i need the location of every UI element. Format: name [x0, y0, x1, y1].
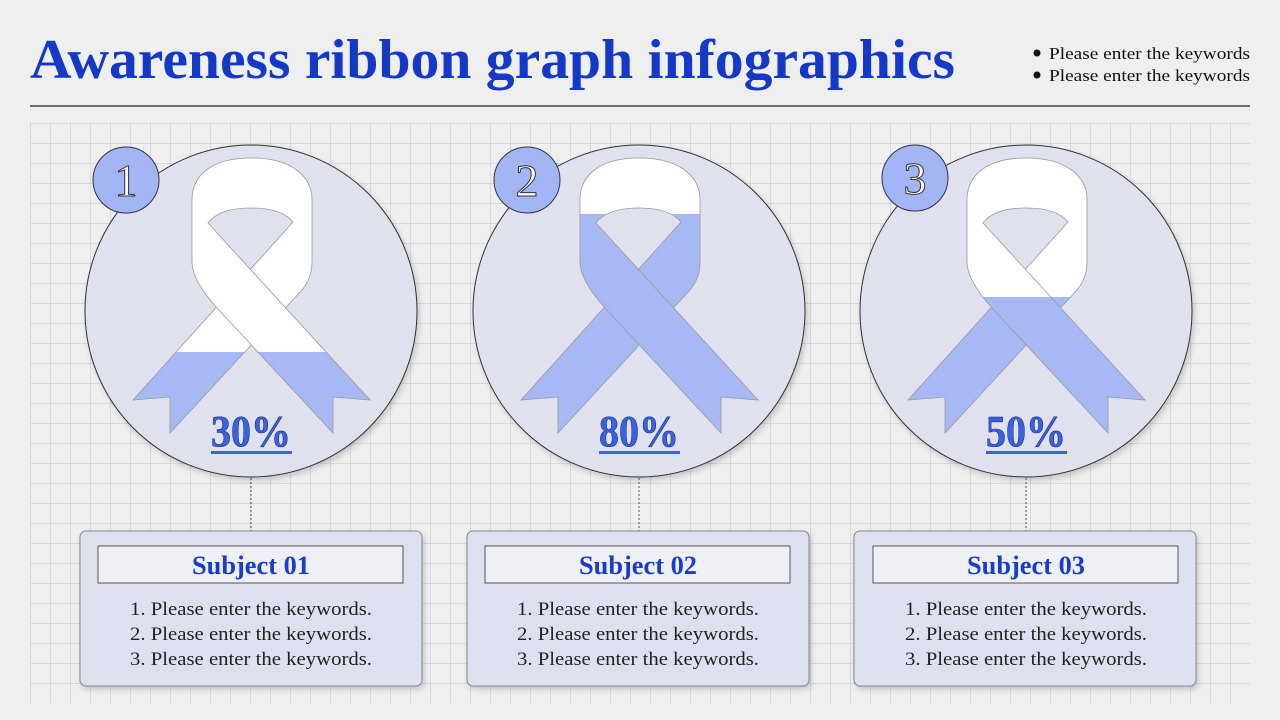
badge 2 [494, 147, 560, 213]
box 3: 3. Please enter the keywords. [905, 649, 1147, 670]
box 2: 2. Please enter the keywords. [517, 624, 759, 645]
box 1: 2. Please enter the keywords. [130, 624, 372, 645]
box 2 [467, 531, 809, 686]
panel: subject 3 [854, 145, 1196, 686]
box 1 [80, 531, 422, 686]
box 3: 1. Please enter the keywords. [905, 599, 1147, 620]
box 3 [854, 531, 1196, 686]
badge 1 [93, 147, 159, 213]
bullet keywords [1034, 44, 1250, 85]
box 1: Subject 01 [192, 551, 310, 580]
percent 30: 30% [211, 407, 291, 456]
box 1: 3. Please enter the keywords. [130, 649, 372, 670]
box 1: 1. Please enter the keywords. [130, 599, 372, 620]
panel: subject 2 [467, 145, 809, 686]
badge 2: 2 [516, 155, 538, 206]
box 2: 1. Please enter the keywords. [517, 599, 759, 620]
circle 3 [860, 145, 1192, 477]
title: Awareness ribbon graph infographics [30, 29, 955, 91]
badge 3 [882, 145, 948, 211]
badge 1: 1 [114, 155, 138, 206]
circle 2 [473, 145, 805, 477]
ribbon 2 [521, 158, 758, 433]
percent 50: 50% [986, 407, 1066, 456]
bullet keywords: Please enter the keywords [1049, 44, 1250, 63]
percent 80: 80% [599, 407, 679, 456]
box 3: Subject 03 [967, 551, 1085, 580]
badge 3: 3 [904, 153, 926, 204]
panel: subject 1 [80, 145, 422, 686]
box 3: 2. Please enter the keywords. [905, 624, 1147, 645]
box 2: 3. Please enter the keywords. [517, 649, 759, 670]
bullet keywords: Please enter the keywords [1049, 66, 1250, 85]
circle 1 [85, 145, 417, 477]
ribbon 1 [133, 158, 370, 433]
ribbon 3 [908, 158, 1145, 433]
box 2: Subject 02 [579, 551, 697, 580]
